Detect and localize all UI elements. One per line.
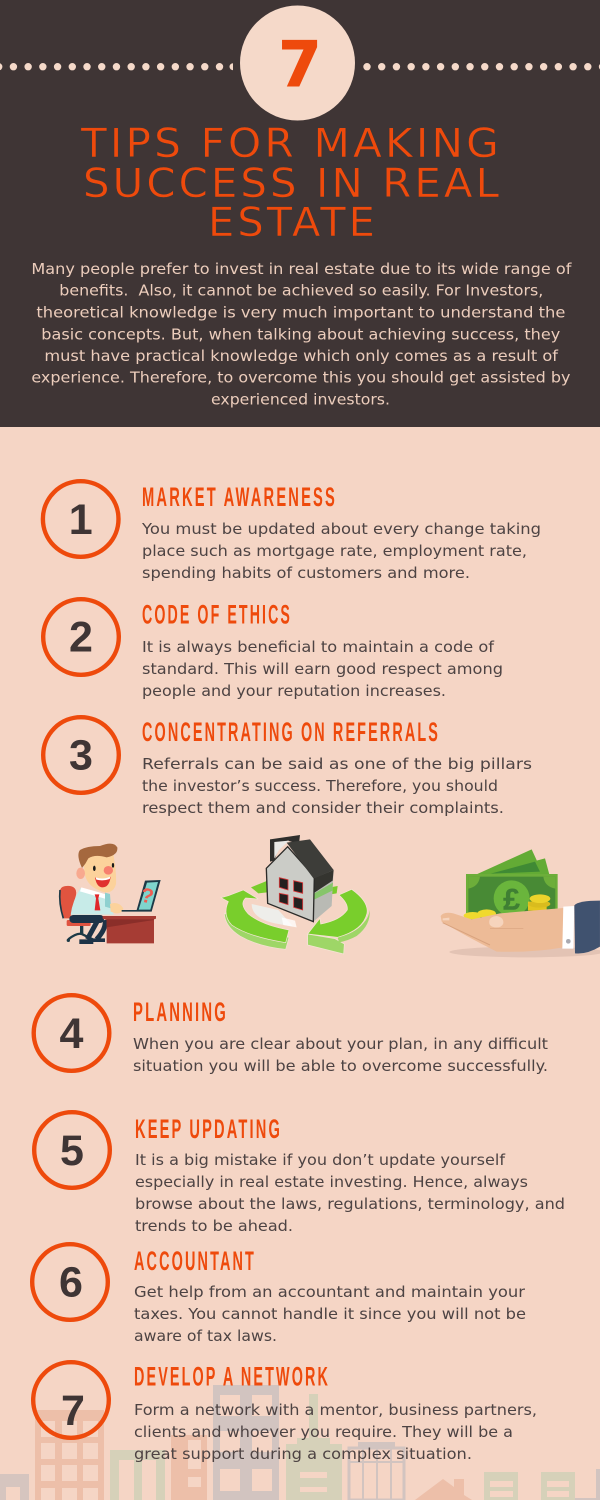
text 7: clients and whoever you require. They will be a (134, 1423, 513, 1441)
title (80, 121, 502, 246)
tip 3: concentrating on referrals (43, 717, 532, 817)
number 4 (34, 995, 109, 1071)
text 3 (142, 755, 532, 817)
number 6 (32, 1244, 108, 1320)
text 5 (135, 1151, 565, 1235)
text 6: taxes. You cannot handle it since you will not be (134, 1305, 526, 1323)
intro paragraph: theoretical knowledge is very much important to understand the (36, 304, 565, 322)
text 4 (133, 1035, 548, 1075)
text 2: people and your reputation increases. (142, 682, 446, 700)
dotted line left (0, 63, 233, 70)
intro paragraph: Many people prefer to invest in real estate due to its wide range of (31, 260, 572, 278)
intro paragraph (31, 260, 572, 408)
number badge (240, 6, 355, 120)
number 2: 2 (69, 614, 93, 662)
number 3 (43, 717, 119, 793)
icon: businessman at laptop: ? (139, 884, 156, 909)
text 7: great support during a complex situation. (134, 1445, 472, 1463)
heading 1: MARKET AWARENESS (142, 482, 337, 512)
intro paragraph: experienced investors. (211, 390, 390, 408)
text 4: When you are clear about your plan, in any difficult (133, 1035, 548, 1053)
number 1: 1 (69, 496, 93, 544)
text 2 (142, 638, 503, 700)
tip 5: keep updating (34, 1112, 565, 1235)
tip 1: market awareness (43, 481, 541, 582)
number 7: 7 (61, 1387, 85, 1435)
intro paragraph: basic concepts. But, when talking about achieving success, they (41, 326, 560, 344)
intro paragraph: must have practical knowledge which only comes as a result of (44, 347, 559, 365)
icon: businessman at laptop (60, 844, 161, 944)
text 2: It is always beneficial to maintain a code of (142, 638, 495, 656)
tip 2: code of ethics (43, 599, 503, 700)
text 5: It is a big mistake if you don’t update yourself (135, 1151, 506, 1169)
number 6: 6 (59, 1258, 83, 1306)
heading 5: KEEP UPDATING (135, 1114, 282, 1144)
dotted line right (367, 63, 600, 70)
icon: house with green arrows (221, 835, 370, 954)
text 6 (134, 1283, 526, 1345)
number 7 (33, 1362, 109, 1438)
skyline background (0, 1385, 600, 1500)
text 1: You must be updated about every change taking (141, 520, 541, 538)
text 1: spending habits of customers and more. (142, 564, 470, 582)
icon: hand holding money: £ (503, 883, 520, 916)
tip 4: planning (34, 995, 548, 1075)
number 5 (34, 1112, 110, 1188)
text 3: respect them and consider their complaints. (142, 799, 504, 817)
heading 7: DEVELOP A NETWORK (134, 1362, 330, 1392)
number 2 (43, 599, 119, 675)
tip 7: develop a network (33, 1362, 537, 1463)
text 3: the investor’s success. Therefore, you should (142, 777, 498, 795)
text 5: especially in real estate investing. Hence, always (135, 1173, 528, 1191)
header panel (0, 0, 600, 427)
icon: hand holding money (441, 849, 600, 957)
number badge: 7 (278, 28, 322, 101)
heading 6: ACCOUNTANT (134, 1246, 256, 1276)
text 1: place such as mortgage rate, employment rate, (142, 542, 527, 560)
title: SUCCESS IN REAL (83, 161, 502, 207)
text 7 (134, 1401, 537, 1463)
number 4: 4 (60, 1010, 84, 1058)
text 5: browse about the laws, regulations, terminology, and (135, 1195, 565, 1213)
tip 6: accountant (32, 1244, 526, 1345)
intro paragraph: benefits. Also, it cannot be achieved so easily. For Investors, (59, 282, 543, 300)
text 7: Form a network with a mentor, business partners, (134, 1401, 537, 1419)
text 6: Get help from an accountant and maintain your (134, 1283, 526, 1301)
text 5: trends to be ahead. (135, 1217, 293, 1235)
text 2: standard. This will earn good respect among (142, 660, 503, 678)
text 4: situation you will be able to overcome successfully. (133, 1057, 548, 1075)
heading 4: PLANNING (133, 997, 228, 1027)
number 5: 5 (60, 1127, 84, 1175)
title: ESTATE (208, 200, 378, 246)
intro paragraph: experience. Therefore, to overcome this you should get assisted by (31, 369, 571, 387)
number 1 (43, 481, 119, 557)
text 1 (141, 520, 541, 582)
number 3: 3 (69, 732, 93, 780)
heading 2: CODE OF ETHICS (142, 600, 292, 630)
text 6: aware of tax laws. (134, 1327, 277, 1345)
title: TIPS FOR MAKING (80, 121, 502, 167)
text 3: Referrals can be said as one of the big pillars (142, 755, 532, 773)
